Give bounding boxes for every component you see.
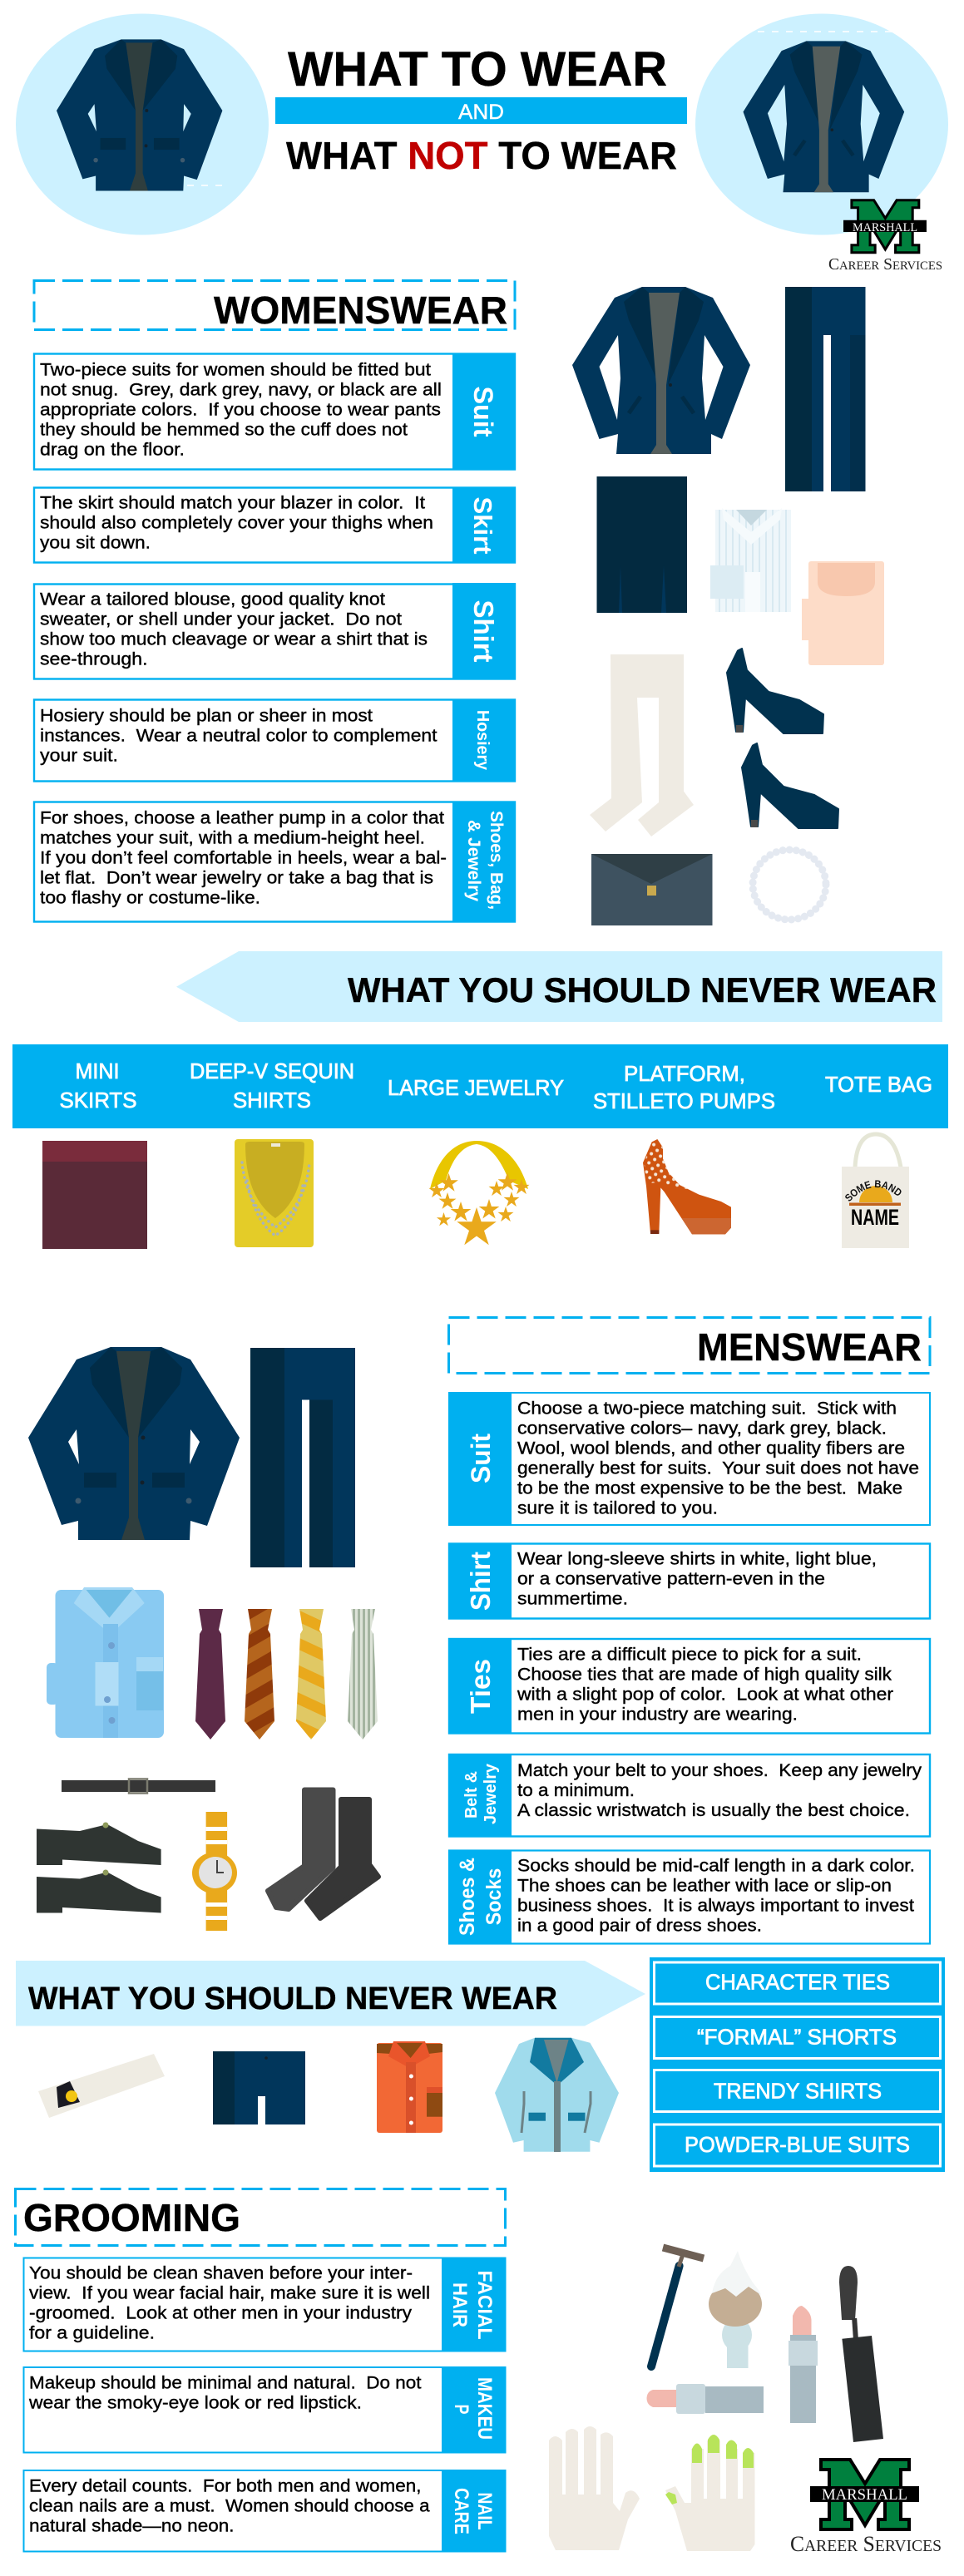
logo: Marshall Career Services top [828,200,942,274]
panel: men suit: generally best for suits. Your suit does not have [517,1458,919,1478]
icon: tote bag: SOME BAND [845,1180,902,1201]
panel: women suit: appropriate colors. If you choose to wear pants [40,401,441,419]
panel: women hosiery: Hosiery should be plan or sheer in most [40,707,373,725]
panel: nail care [23,2470,506,2553]
panel: men belt and jewelry: A classic wristwatch is usually the best choice. [517,1801,910,1820]
icon: men's trousers [250,1348,355,1567]
icon: tote bag: NAME [851,1205,899,1230]
icon: mascara [839,2266,883,2442]
panel: men shirt: summertime. [517,1590,628,1608]
icon: men's blazer [28,1347,240,1540]
ellipse: header left [16,13,269,234]
title: AND [458,101,504,124]
panel: women skirt: Skirt [468,497,497,554]
panel: women skirt: should also completely cover your thighs when [40,514,433,532]
icon: header men's blazer [57,39,222,191]
panel: women hosiery: your suit. [40,747,118,765]
icon: skirt [597,476,687,613]
panel: women shirt: sweater, or shell under your jacket. Do not [40,610,402,629]
icon: belt [62,1779,215,1793]
panel: men shoes and socks: The shoes can be leather with lace or slip-on [517,1876,892,1896]
panel: facial hair: FACIAL [473,2270,496,2340]
panel: women skirt: you sit down. [40,534,151,552]
panel: men suit: Choose a two-piece matching suit. Stick with [517,1399,897,1419]
panel: men suit [448,1392,930,1526]
panel: men suit: conservative colors– navy, dark grey, black. [517,1419,887,1439]
arrow: what you should never wear (men) [16,1961,645,2026]
band: women never wear labels [12,1044,948,1128]
panel: men belt and jewelry [448,1754,930,1838]
heading: womenswear: WOMENSWEAR [214,289,507,332]
heading: grooming [15,2189,506,2245]
heading: menswear: MENSWEAR [697,1325,922,1369]
panel: men never wear list [650,1957,945,2172]
panel: men never wear list: CHARACTER TIES [705,1971,890,1994]
panel: facial hair: view. If you wear facial hair, make sure it is well [29,2283,430,2303]
icon: powder-blue jacket [495,2038,619,2152]
arrow: what you should never wear (men): WHAT YOU SHOULD NEVER WEAR [28,1981,557,2016]
icon: tote bag [842,1133,909,1248]
logo: Marshall Career Services bottom: CAREER SERVICES [790,2532,942,2556]
panel: men shoes and socks: in a good pair of dress shoes. [517,1916,762,1936]
icon: navy pump 1 [727,649,823,733]
panel: women shoes, bag and jewelry: let flat. Don’t wear jewelry or take a bag that is [40,868,433,888]
panel: women shirt: see-through. [40,650,148,669]
panel: women shoes, bag and jewelry: & Jewelry [464,820,483,901]
panel: nail care: NAIL [473,2493,496,2529]
panel: facial hair [23,2257,506,2351]
panel: men shoes and socks: Socks should be mid-calf length in a dark color. [517,1856,915,1876]
icon: sequin shirt [235,1139,314,1247]
band: women never wear labels: MINI [75,1060,120,1083]
panel: facial hair: HAIR [448,2282,471,2327]
icon: clean hand [549,2426,640,2550]
arrow: what you should never wear (women): WHAT YOU SHOULD NEVER WEAR [348,970,937,1009]
icon: upright lipstick [789,2306,818,2423]
icon: platform stiletto [643,1139,731,1234]
icon: sideways lipstick [647,2384,764,2414]
panel: facial hair: -groomed. Look at other men in your industry [29,2303,413,2323]
band: women never wear labels: TOTE BAG [825,1073,932,1097]
panel: men shoes and socks: Socks [482,1868,506,1925]
panel: women shoes, bag and jewelry: matches your suit, with a medium-height heel. [40,828,425,848]
ellipse: header right [695,13,948,234]
icon: orange striped tie [245,1609,274,1740]
panel: women suit [34,353,516,471]
icon: hosiery [590,654,694,836]
panel: women shirt: Wear a tailored blouse, good quality knot [40,590,385,609]
panel: women shoes, bag and jewelry: Shoes, Bag, [487,811,506,910]
panel: men suit: to be the most expensive to be the best. Make [517,1478,902,1498]
icon: socks [268,1789,378,1918]
icon: wristwatch [192,1812,237,1931]
icon: mini skirt [42,1141,147,1249]
icon: shorts [213,2051,305,2124]
heading: menswear [449,1317,930,1374]
icon: clutch bag [591,854,712,925]
panel: men shoes and socks: Shoes & [456,1858,479,1936]
panel: women shoes, bag and jewelry [34,802,516,923]
panel: men never wear list: “FORMAL” SHORTS [697,2026,897,2049]
panel: nail care: clean nails are a must. Women should choose a [29,2496,430,2516]
panel: men suit: Wool, wool blends, and other quality fibers are [517,1439,905,1458]
panel: men belt and jewelry: to a minimum. [517,1781,635,1800]
band: women never wear labels: SHIRTS [233,1089,311,1113]
panel: men shirt: Wear long-sleeve shirts in white, light blue, [517,1550,877,1568]
icon: yellow striped tie [296,1609,326,1740]
panel: women shirt: Shirt [468,600,499,663]
panel: makeup [23,2366,506,2453]
icon: women's trousers [785,287,865,491]
panel: men ties: men in your industry are wearing. [517,1705,798,1725]
panel: women suit: Suit [468,386,498,437]
arrow: what you should never wear (women) [176,951,942,1022]
band: women never wear labels: PLATFORM, [624,1063,745,1086]
panel: makeup: wear the smoky-eye look or red lipstick. [28,2393,362,2413]
panel: women hosiery [34,698,516,782]
band: women never wear labels: LARGE JEWELRY [388,1077,564,1100]
panel: makeup: P [450,2405,472,2415]
heading: womenswear [34,281,515,332]
panel: nail care: natural shade—no neon. [29,2516,235,2536]
title [275,42,687,177]
icon: razor [651,2248,704,2366]
panel: men never wear list: POWDER-BLUE SUITS [685,2134,910,2157]
panel: women shoes, bag and jewelry: too flashy or costume-like. [40,888,260,908]
panel: women shoes, bag and jewelry: If you don’t feel comfortable in heels, wear a bal- [40,848,447,868]
panel: makeup: Makeup should be minimal and natural. Do not [29,2373,422,2393]
icon: plum tie [195,1609,225,1740]
heading: grooming: GROOMING [23,2196,240,2239]
icon: shaving brush [709,2251,762,2368]
panel: women hosiery: instances. Wear a neutral color to complement [40,727,438,745]
icon: star necklace [429,1141,529,1245]
panel: men shirt: Shirt [465,1552,496,1611]
title: WHAT TO WEAR [288,42,667,96]
panel: men belt and jewelry: Belt & [462,1771,481,1818]
logo: Marshall Career Services top: MARSHALL [853,221,917,234]
icon: men's blue shirt [47,1587,164,1738]
panel: women skirt: The skirt should match your blazer in color. It [40,494,425,512]
panel: men belt and jewelry: Match your belt to your shoes. Keep any jewelry [517,1761,922,1780]
panel: men never wear list: TRENDY SHIRTS [714,2080,882,2104]
panel: men suit: Suit [466,1434,496,1483]
panel: men ties: Ties [465,1659,496,1714]
panel: women suit: drag on the floor. [40,441,185,459]
panel: women skirt [34,487,516,564]
title: WHAT NOT TO WEAR [286,134,677,177]
icon: dress shoes [37,1823,161,1912]
panel: men ties: Ties are a difficult piece to pick for a suit. [517,1645,862,1665]
panel: men ties: with a slight pop of color. Look at what other [517,1685,893,1705]
icon: pearl necklace [753,850,826,920]
panel: women shirt [34,583,516,680]
panel: women suit: not snug. Grey, dark grey, navy, or black are all [40,381,442,399]
panel: men ties: Choose ties that are made of high quality silk [517,1665,892,1685]
panel: facial hair: You should be clean shaven before your inter- [29,2263,413,2283]
icon: character tie [38,2054,165,2118]
icon: navy pump 2 [742,743,838,828]
panel: men shoes and socks: business shoes. It is always important to invest [517,1896,914,1916]
panel: facial hair: for a guideline. [29,2323,155,2343]
panel: men belt and jewelry: Jewelry [482,1763,500,1824]
panel: nail care: Every detail counts. For both men and women, [29,2476,421,2496]
panel: women hosiery: Hosiery [473,710,492,771]
panel: men suit: sure it is tailored to you. [517,1498,718,1518]
logo: Marshall Career Services bottom: MARSHALL [822,2486,907,2504]
panel: men ties [448,1638,930,1735]
panel: women shoes, bag and jewelry: For shoes, choose a leather pump in a color that [40,808,444,828]
logo: Marshall Career Services top: CAREER SERVICES [828,255,942,274]
panel: men shoes and socks [448,1849,930,1944]
icon: neon-nail hand [665,2435,755,2551]
panel: women suit: they should be hemmed so the cuff does not [40,421,408,439]
icon: peach camisole [802,561,884,665]
panel: women suit: Two-piece suits for women should be fitted but [40,361,431,379]
icon: green pinstripe tie [348,1609,378,1740]
panel: women shirt: show too much cleavage or wear a shirt that is [40,630,428,649]
band: women never wear labels: STILLETO PUMPS [593,1090,775,1113]
icon: blouse [710,508,791,612]
panel: makeup: MAKEU [473,2377,496,2440]
band: women never wear labels: DEEP-V SEQUIN [190,1060,354,1083]
icon: women's blazer [572,287,750,454]
panel: men shirt [448,1543,930,1620]
icon: trendy orange shirt [377,2041,442,2133]
band: women never wear labels: SKIRTS [60,1089,136,1113]
panel: nail care: CARE [450,2488,472,2534]
icon: header women's blazer [744,41,904,192]
panel: men shirt: or a conservative pattern-even in the [517,1570,825,1588]
logo: Marshall Career Services bottom [790,2460,942,2556]
